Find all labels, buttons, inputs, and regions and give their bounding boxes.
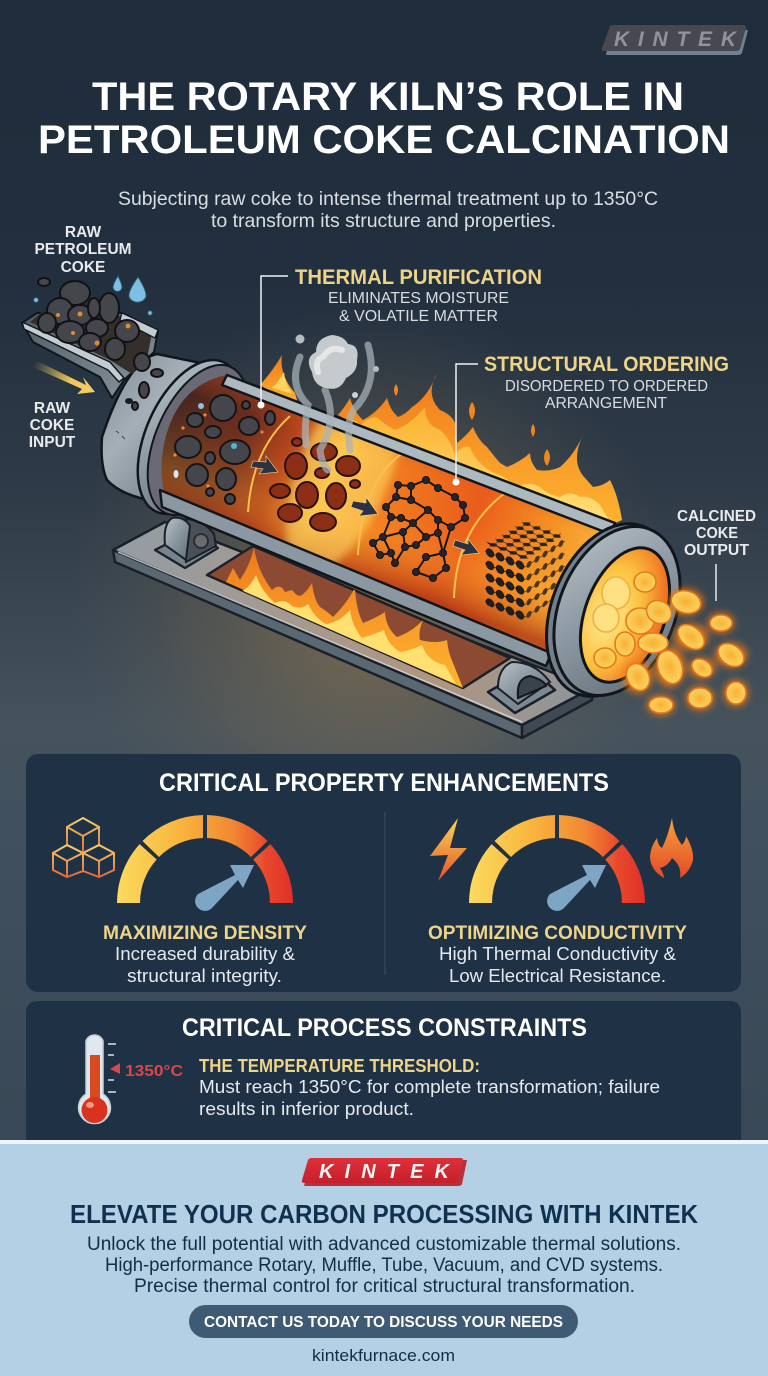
panel: critical property enhancements: [26, 754, 741, 992]
subtitle: Subjecting raw coke to intense thermal treatment up to 1350°C: [118, 188, 658, 210]
logo: top right KINTEK badge: [602, 25, 748, 55]
callout: structural ordering: [452, 353, 729, 486]
input arrow: [33, 360, 95, 394]
kiln inlet collar: [102, 344, 269, 530]
title: [38, 75, 730, 162]
text: optimizing conductivity: [428, 923, 687, 986]
label: raw coke input: INPUT: [29, 434, 76, 451]
process arrows: [251, 456, 479, 555]
icon: thermometer: [78, 1035, 116, 1124]
label: 1350°C marker: 1350°C: [125, 1063, 183, 1080]
text: optimizing conductivity: OPTIMIZING CONDUCTIVITY: [428, 923, 687, 944]
callout: thermal purification: & VOLATILE MATTER: [339, 308, 498, 325]
left support bearing: [155, 518, 218, 568]
raw coke pile: [38, 278, 163, 410]
callout: calcined coke output: COKE: [696, 525, 738, 542]
title: THE ROTARY KILN’S ROLE IN: [92, 75, 684, 119]
label: raw coke input: COKE: [30, 417, 74, 434]
callout: thermal purification: THERMAL PURIFICATION: [295, 266, 542, 289]
feed chute: [22, 312, 158, 398]
text: maximizing density: [103, 923, 307, 986]
label: raw coke input: [29, 400, 76, 451]
callout: calcined coke output: [677, 508, 756, 601]
icon: stacked cubes: [53, 818, 114, 877]
heated coke pieces: [270, 438, 360, 531]
text: optimizing conductivity: Low Electrical Resistance.: [449, 966, 666, 986]
title: PETROLEUM COKE CALCINATION: [38, 118, 730, 162]
water droplets: [34, 276, 152, 315]
smoke plume: [296, 334, 379, 470]
callout: thermal purification: ELIMINATES MOISTURE: [328, 290, 509, 307]
label: raw petroleum coke: RAW: [65, 224, 101, 241]
disordered carbon network: [369, 476, 469, 582]
text: maximizing density: MAXIMIZING DENSITY: [103, 923, 307, 944]
callout: structural ordering: STRUCTURAL ORDERING: [484, 353, 729, 376]
kiln outlet ring: [523, 505, 704, 715]
icon: lightning bolt: [430, 818, 467, 881]
logo: KINTEK red badge: [302, 1158, 467, 1186]
callout: calcined coke output: OUTPUT: [684, 542, 750, 559]
text: maximizing density: structural integrity.: [127, 966, 282, 986]
text: temperature threshold: [199, 1056, 660, 1119]
footer text: High-performance Rotary, Muffle, Tube, Vacuum, and CVD systems.: [105, 1255, 663, 1276]
kiln tube body: [160, 351, 615, 666]
footer heading: ELEVATE YOUR CARBON PROCESSING WITH KINTEK: [70, 1199, 698, 1229]
panel heading: constraints: CRITICAL PROCESS CONSTRAINTS: [182, 1014, 587, 1042]
calcined coke pellets: [593, 572, 748, 713]
text: temperature threshold: THE TEMPERATURE THRESHOLD:: [199, 1056, 480, 1076]
label: raw petroleum coke: COKE: [61, 259, 105, 276]
icon: flame: [650, 818, 693, 878]
footer text: Unlock the full potential with advanced customizable thermal solutions.: [87, 1234, 681, 1255]
calcined coke pellets glow: [624, 589, 748, 715]
label: raw petroleum coke: [34, 224, 132, 276]
callout: calcined coke output: CALCINED: [677, 508, 756, 525]
gauge: conductivity: [469, 815, 645, 911]
panel: critical process constraints: [26, 1001, 741, 1140]
logo: top right KINTEK badge: KINTEK: [614, 28, 738, 51]
contact button: CONTACT US TODAY TO DISCUSS YOUR NEEDS: [204, 1314, 563, 1331]
callout: structural ordering: DISORDERED TO ORDERED: [505, 378, 708, 395]
footer text: [87, 1234, 681, 1297]
footer text: Precise thermal control for critical structural transformation.: [134, 1276, 635, 1297]
subtitle: [118, 188, 658, 232]
contact button: [189, 1305, 578, 1338]
ordered carbon lattice: [485, 520, 565, 624]
website: kintekfurnace.com: [312, 1346, 455, 1365]
lower burner flames: [207, 546, 510, 688]
gauge: density: [117, 815, 293, 911]
text: optimizing conductivity: High Thermal Conductivity &: [439, 944, 676, 964]
text: temperature threshold: results in inferior product.: [199, 1099, 414, 1119]
text: temperature threshold: Must reach 1350°C for complete transformation; failure: [199, 1077, 660, 1097]
text: maximizing density: Increased durability &: [115, 944, 295, 964]
panel heading: enhancements: CRITICAL PROPERTY ENHANCEMENTS: [159, 769, 609, 797]
flames behind kiln: [260, 355, 622, 530]
right support bearing: [488, 662, 555, 713]
logo: KINTEK red badge: KINTEK: [319, 1161, 451, 1183]
label: raw petroleum coke: PETROLEUM: [34, 241, 132, 258]
label: raw coke input: RAW: [34, 400, 70, 417]
subtitle: to transform its structure and properties.: [211, 210, 556, 232]
raw coke inside kiln: [174, 395, 275, 504]
kiln base frame: [113, 522, 592, 738]
callout: structural ordering: ARRANGEMENT: [545, 395, 667, 412]
callout: thermal purification: [258, 266, 542, 408]
panel: footer call to action: [0, 1140, 768, 1376]
